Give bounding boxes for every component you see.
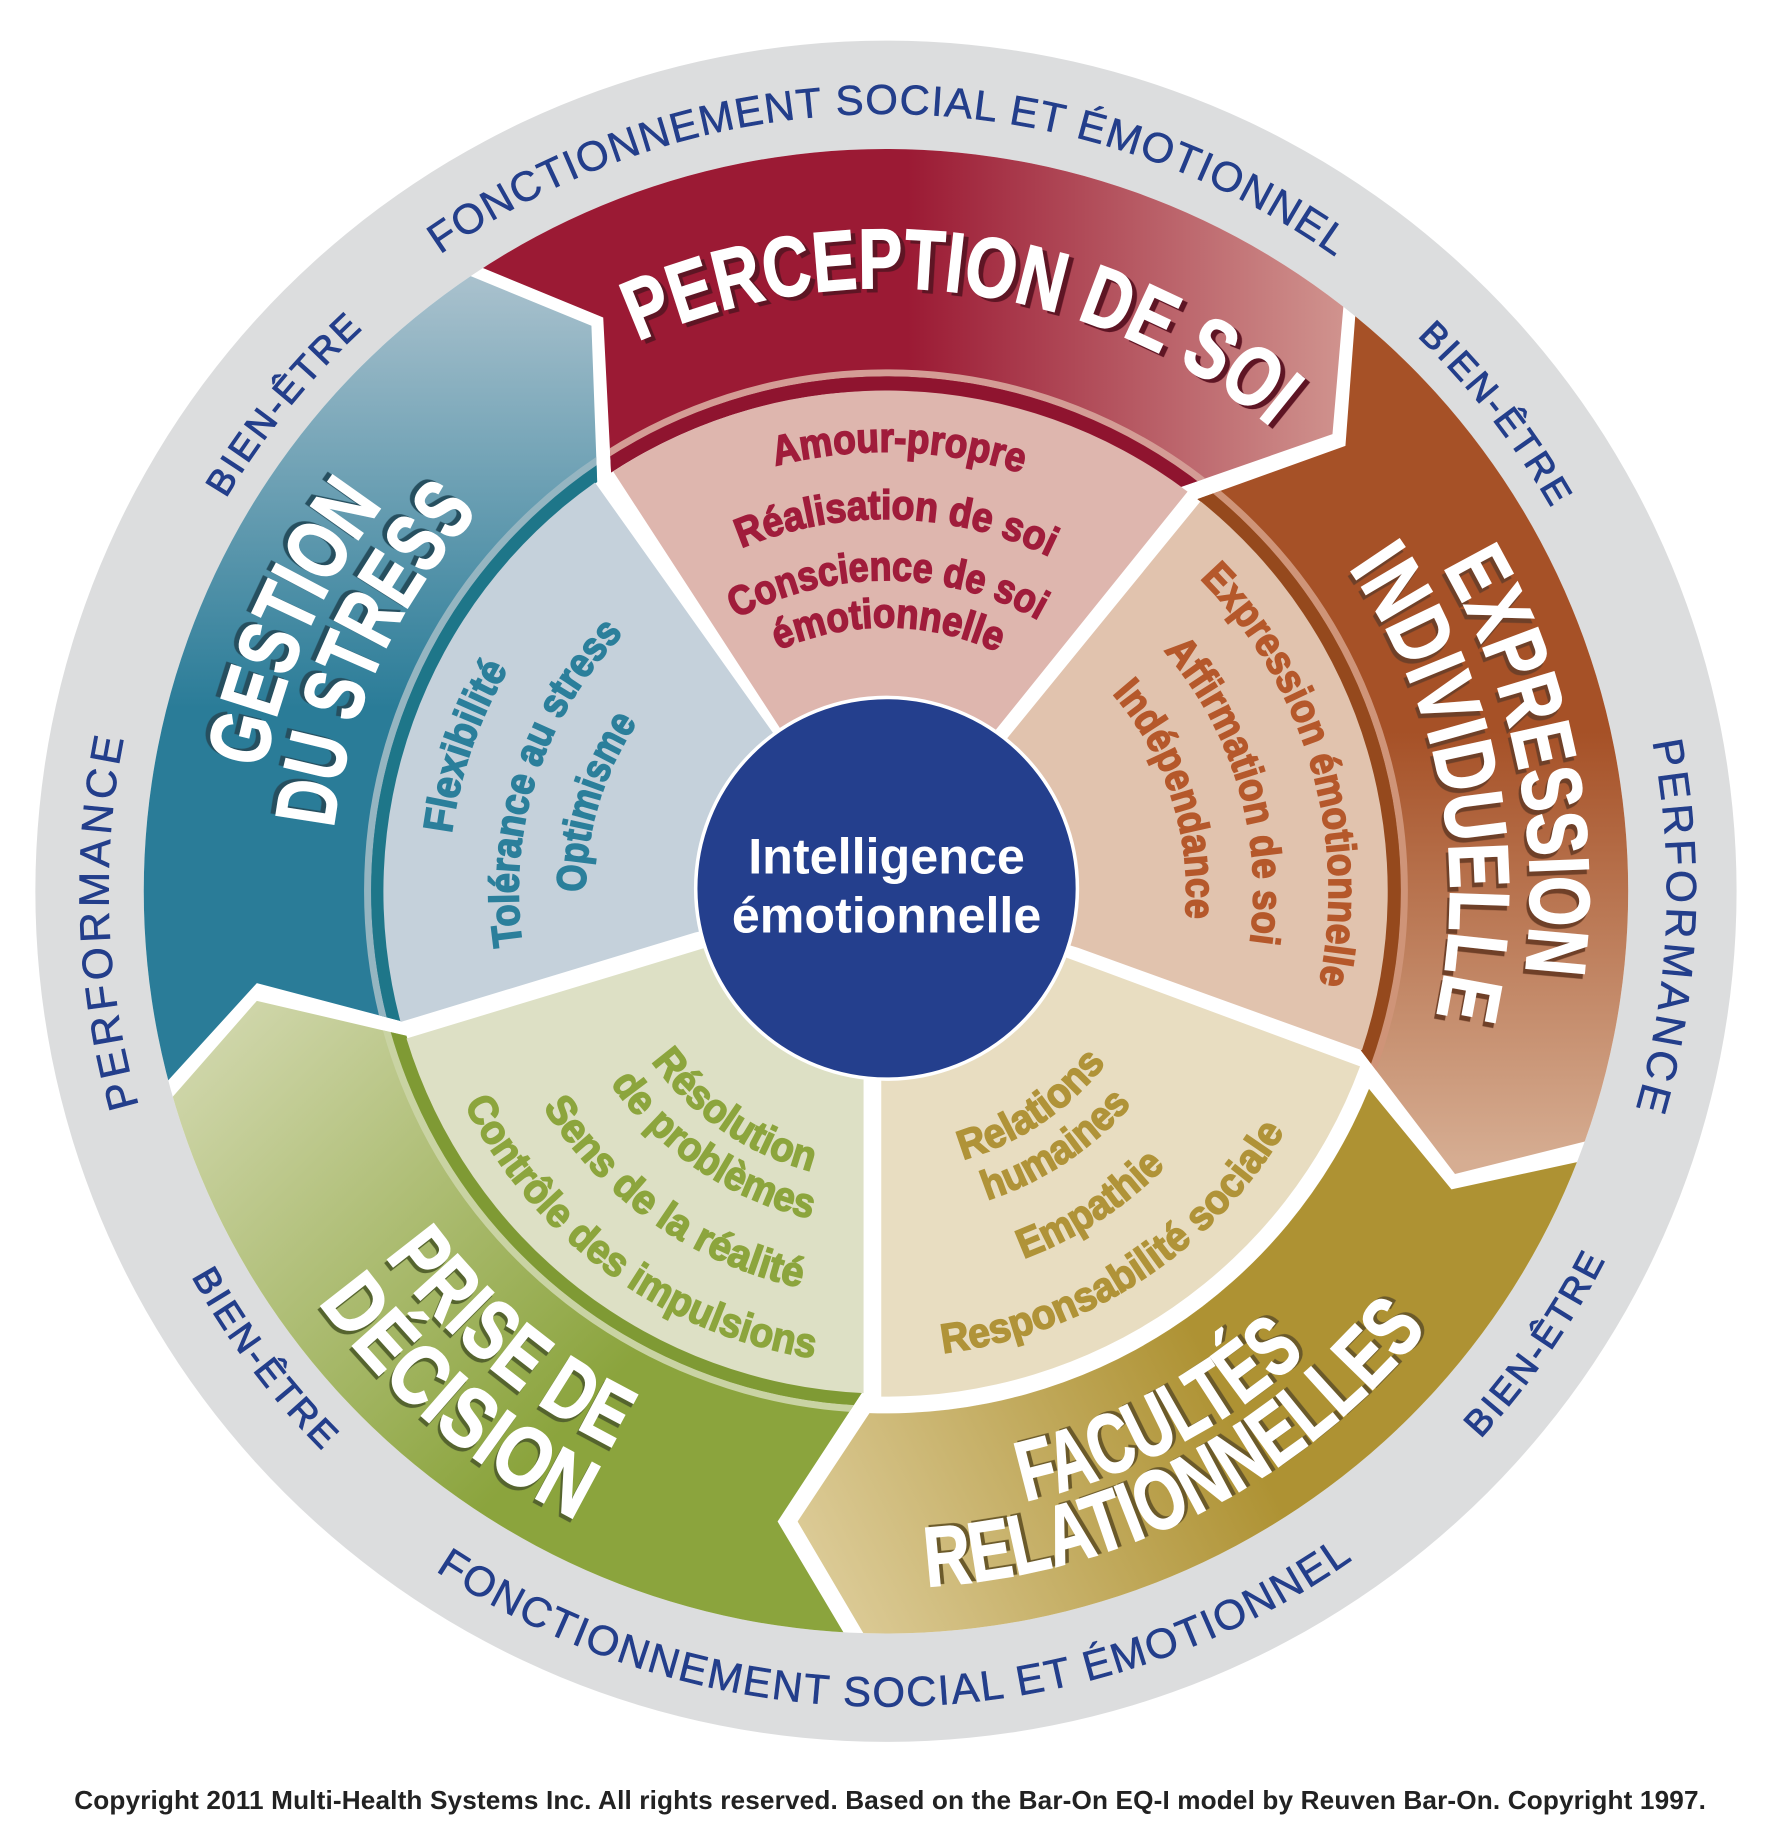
text block: gestion du stress items: [422, 622, 635, 949]
center circle: intelligence emotionnelle: Intelligence: [748, 828, 1025, 885]
text block: perception de soi items: [728, 428, 1061, 650]
ring label: performance right: PERFORMANCE: [1636, 740, 1697, 1114]
text block: expression individuelle items: [1112, 560, 1358, 986]
heading: gestion du stress: DU STRESS: [270, 479, 472, 825]
white base disc: [144, 149, 1628, 1633]
panel: facultes relationnelles wedge: [881, 891, 1360, 1397]
panel: gestion du stress band: [144, 276, 598, 1080]
text block: perception de soi items: émotionnelle: [774, 597, 1003, 650]
heading: expression individuelle: EXPRESSION: [1442, 542, 1590, 980]
ring label: performance left: PERFORMANCE: [79, 736, 138, 1110]
heading: facultes relationnelles: RELATIONNELLES: [924, 1296, 1424, 1588]
text block: facultes relationnelles items: humaines: [978, 1092, 1129, 1200]
text block: prise de decision items: Résolution: [652, 1044, 814, 1172]
text block: expression individuelle items: Affirmation de soi: [1163, 640, 1282, 945]
panel: facultes relationnelles band: [798, 1089, 1577, 1634]
text block: prise de decision items: de problèmes: [613, 1074, 814, 1218]
center circle: intelligence emotionnelle: émotionnelle: [732, 887, 1041, 943]
panel: prise de decision band: [172, 1001, 862, 1632]
heading: expression individuelle: [1348, 538, 1590, 1028]
ring label: bien-etre bottom right: BIEN-ÊTRE: [1463, 1250, 1605, 1438]
text block: prise de decision items: Sens de la réalité: [546, 1095, 804, 1287]
ring label: bien-etre top left: BIEN-ÊTRE: [205, 312, 362, 497]
text block: facultes relationnelles items: Relations: [955, 1052, 1104, 1160]
center circle: intelligence emotionnelle: [696, 697, 1077, 1079]
text block: perception de soi items: Amour-propre: [776, 428, 1025, 472]
text block: expression individuelle items: Indépendance: [1112, 676, 1211, 918]
coloured outer bands: [130, 120, 1649, 1651]
heading: prise de decision: PRISE DE: [384, 1222, 639, 1452]
panel: gestion du stress wedge: [383, 482, 886, 1022]
heading: gestion du stress: [205, 472, 472, 825]
heading: gestion du stress: GESTION: [205, 472, 382, 762]
text block: gestion du stress items: Flexibilité: [422, 656, 506, 832]
ring label: bottom: FONCTIONNEMENT SOCIAL ET ÉMOTIONNEL: [438, 1544, 1352, 1708]
ring label: bien-etre bottom left: BIEN-ÊTRE: [192, 1266, 340, 1450]
panel: perception de soi band: [483, 149, 1344, 487]
panel: prise de decision wedge: [406, 891, 886, 1393]
text block: facultes relationnelles items: Empathie: [1014, 1154, 1162, 1259]
text block: perception de soi items: Réalisation de soi: [732, 488, 1061, 556]
heading: prise de decision: DÉCISION: [317, 1269, 601, 1522]
text block: facultes relationnelles items: Responsabilité sociale: [940, 1123, 1282, 1354]
text block: gestion du stress items: Optimisme: [556, 714, 635, 891]
ring label: top: FONCTIONNEMENT SOCIAL ET ÉMOTIONNEL: [426, 84, 1339, 256]
heading: facultes relationnelles: FACULTÉS: [1014, 1315, 1303, 1502]
text block: gestion du stress items: Tolérance au stress: [488, 622, 620, 949]
panel: perception de soi wedge: [613, 391, 1188, 891]
text block: perception de soi items: Conscience de soi: [728, 552, 1052, 620]
panel: expression individuelle band: [1197, 316, 1628, 1174]
text block: expression individuelle items: Expression émotionnelle: [1200, 560, 1358, 986]
copyright line: Copyright 2011 Multi-Health Systems Inc. All rights reserved. Based on the Bar-On EQ-I model by Reuven Bar-On. Copyright 1997.: [74, 1785, 1706, 1815]
panel: expression individuelle wedge: [886, 501, 1388, 1050]
ring label: bien-etre top right: BIEN-ÊTRE: [1418, 320, 1572, 507]
heading: expression individuelle: INDIVIDUELLE: [1348, 538, 1510, 1028]
heading: perception de soi: PERCEPTION DE SOI: [618, 228, 1310, 429]
text block: prise de decision items: Contrôle des impulsions: [468, 1096, 816, 1358]
